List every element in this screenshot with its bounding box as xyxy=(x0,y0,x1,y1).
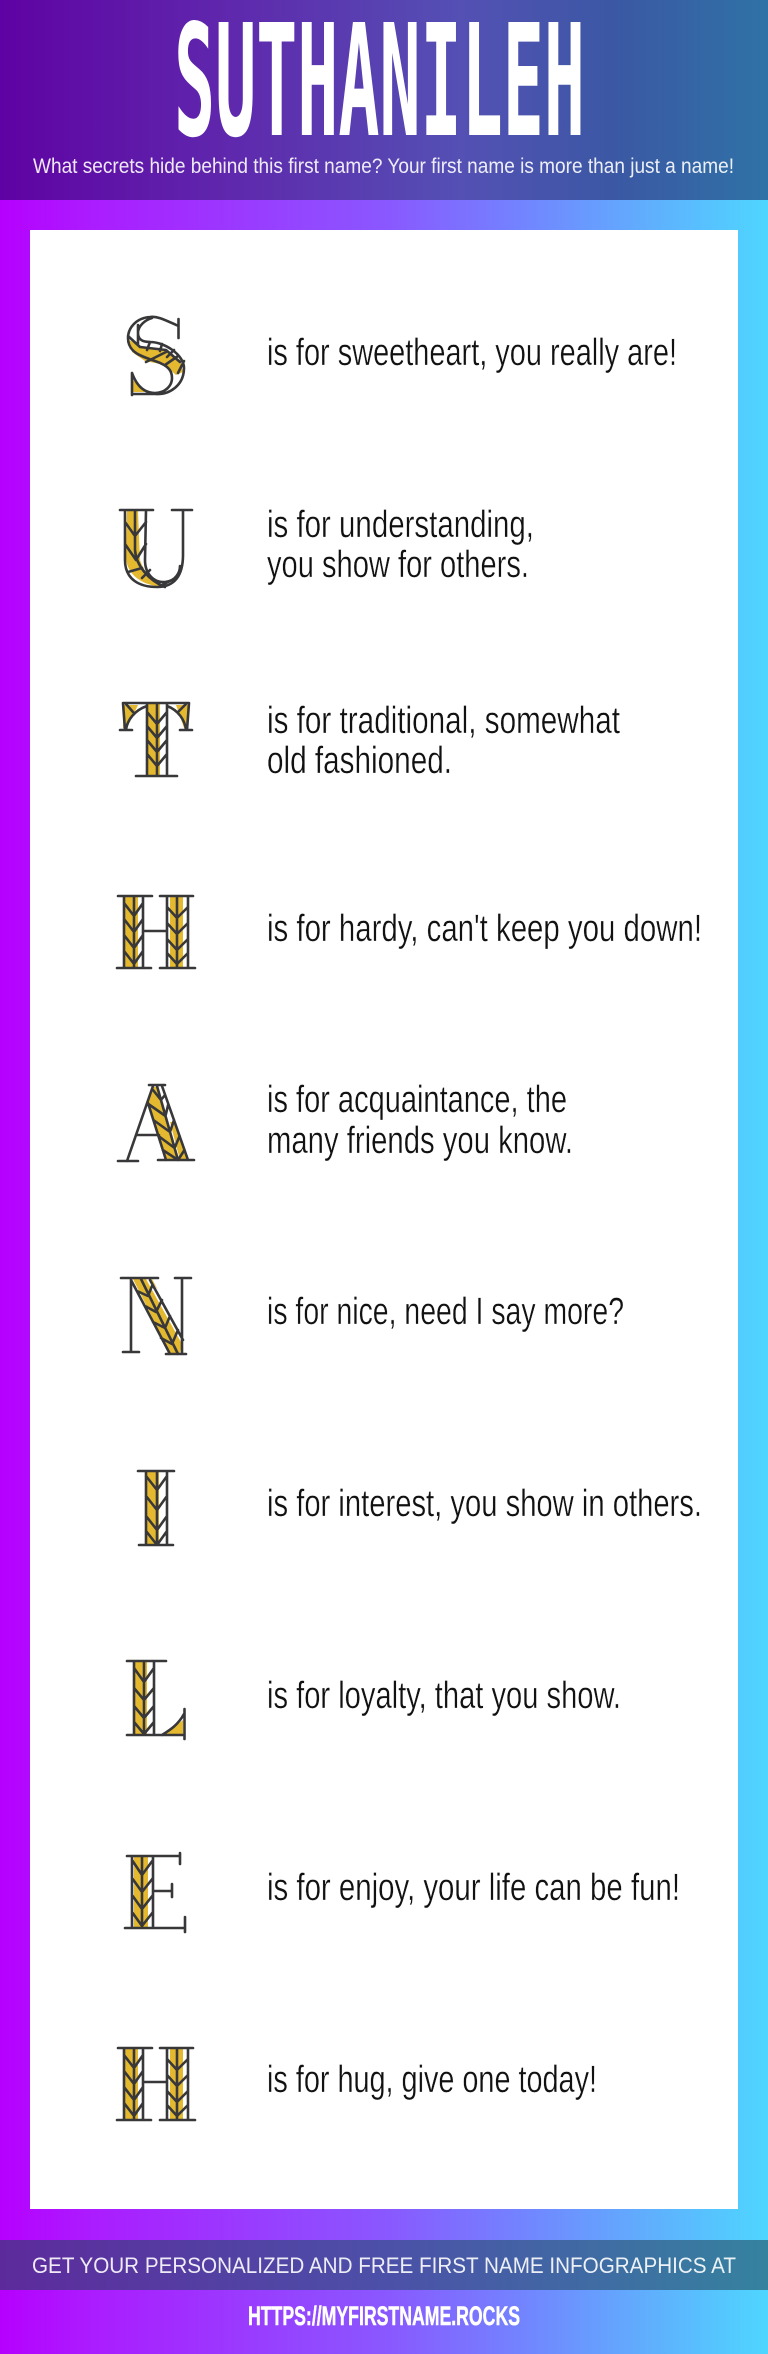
icon: letter U xyxy=(120,510,192,587)
footer call to action: GET YOUR PERSONALIZED AND FREE FIRST NAME INFOGRAPHICS AT xyxy=(32,2253,736,2278)
text: U lines xyxy=(267,504,534,586)
text: N line: is for nice, need I say more? xyxy=(267,1291,624,1333)
icon: letter N xyxy=(121,1278,191,1354)
header band xyxy=(0,0,768,200)
text: H second line: is for hug, give one today! xyxy=(267,2059,597,2101)
text: L line: is for loyalty, that you show. xyxy=(267,1675,621,1717)
text: A lines: is for acquaintance, the xyxy=(267,1079,567,1121)
icon: letter H second xyxy=(117,2048,195,2120)
icon: letter T xyxy=(120,703,192,776)
icon: letter E xyxy=(125,1853,185,1932)
text: U lines: is for understanding, xyxy=(267,504,534,546)
text: T lines: old fashioned. xyxy=(267,740,452,782)
icon: letter H xyxy=(117,896,195,968)
footer band xyxy=(0,2240,768,2290)
text: A lines: many friends you know. xyxy=(267,1120,573,1162)
icon: letter L xyxy=(127,1661,184,1739)
icon: letter I xyxy=(138,1471,174,1545)
text: U lines: you show for others. xyxy=(267,544,529,586)
icon: letter A xyxy=(118,1085,194,1161)
text: T lines xyxy=(267,700,620,782)
icon: letter S xyxy=(128,317,184,395)
text: A lines xyxy=(267,1079,573,1162)
text: T lines: is for traditional, somewhat xyxy=(267,700,620,742)
white content panel xyxy=(30,230,738,2209)
footer url: HTTPS://MYFIRSTNAME.ROCKS xyxy=(248,2301,520,2331)
